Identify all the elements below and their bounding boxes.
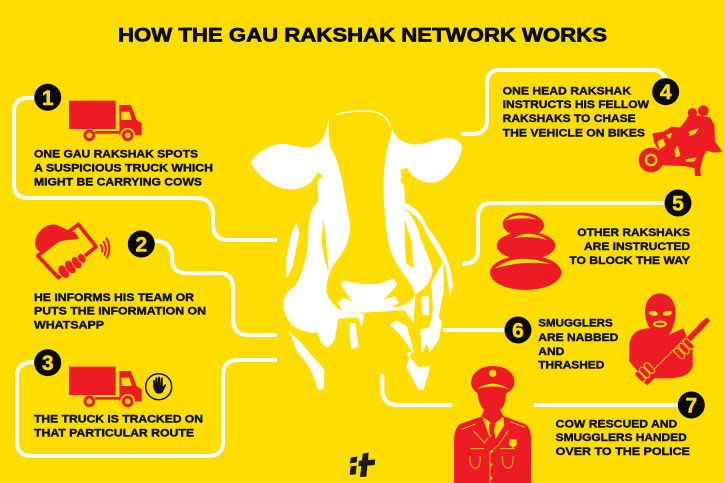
cow muzzle [338,279,415,313]
cow left ear and face [251,121,364,347]
step 2 [34,224,206,332]
number badge 3: 3 [42,352,54,375]
step 2 text: HE INFORMS HIS TEAM OR [34,292,194,304]
step 4 text [503,85,649,139]
number badge 5 [664,190,692,216]
title: HOW THE GAU RAKSHAK NETWORK WORKS [118,24,607,46]
step 6 text [538,318,618,372]
step 6 text: AND [538,346,564,358]
number badge 7 [678,392,705,418]
number badge 2 [128,230,155,258]
cow left neck stripe [287,223,299,277]
step 6 text: ARE NABBED [538,332,618,344]
logo [350,453,375,477]
icon: masked smuggler with gun [629,293,710,385]
step 2 text: WHATSAPP [34,320,104,332]
icon: truck [69,101,142,143]
step 6 text: SMUGGLERS [538,318,613,330]
step 5 text [569,227,690,267]
step 2 text [34,292,206,332]
step 1 [34,84,213,188]
step 3 [34,349,203,440]
step 4 [503,78,722,176]
cow bottom right patch [390,321,430,389]
cow head illustration [251,111,462,389]
step 7 text: COW RESCUED AND [556,418,677,430]
step 7 text: SMUGGLERS HANDED [556,432,687,444]
number badge 5: 5 [672,192,684,216]
step 4 text: THE VEHICLE ON BIKES [503,127,645,139]
step 1 text: MIGHT BE CARRYING COWS [34,176,202,188]
cow left neck cut [322,220,328,271]
step 7 text: OVER TO THE POLICE [556,446,690,458]
step 1 text [34,149,213,188]
cow small strip [403,303,414,322]
step 5 text: OTHER RAKSHAKS [577,227,690,239]
cow small patch [422,296,429,315]
step 2 text: PUTS THE INFORMATION ON [34,306,206,318]
step 7 [454,366,705,483]
step 3 text: THE TRUCK IS TRACKED ON [34,414,203,426]
number badge 7: 7 [685,394,697,418]
cow right lower patch [421,262,443,353]
step 7 text [556,418,690,458]
step 1 text: A SUSPICIOUS TRUCK WHICH [34,163,213,175]
icon: motorbike riders [639,105,722,176]
cow bottom left patch [290,333,324,389]
number badge 1 [34,84,61,111]
cow head top line [337,111,391,127]
step 3 text [34,414,203,440]
cow right neck cut [405,222,413,267]
icon: stacked stones [490,212,561,290]
step 6 text: THRASHED [538,360,604,372]
icon: stop hand [146,374,172,400]
connector lines [14,70,682,456]
step 4 text: ONE HEAD RAKSHAK [503,85,632,97]
step 5 [490,190,692,290]
number badge 6: 6 [512,320,524,342]
number badge 6 [504,316,532,344]
step 1 text: ONE GAU RAKSHAK SPOTS [34,149,198,161]
number badge 4 [652,78,679,105]
step 3 text: THAT PARTICULAR ROUTE [34,428,194,440]
step 6 [504,293,710,385]
step 4 text: INSTRUCTS HIS FELLOW [503,99,649,111]
number badge 4: 4 [660,81,672,104]
cow chin spot [350,323,358,349]
number badge 3 [34,349,61,376]
number badge 2: 2 [135,234,147,256]
step 5 text: ARE INSTRUCTED [584,241,690,253]
number badge 1: 1 [42,87,54,110]
step 4 text: RAKSHAKS TO CHASE [503,113,636,125]
cow right neck strand [405,203,453,295]
icon: truck [69,367,142,409]
cow right ear and face [384,130,462,294]
icon: hand holding phone [35,224,109,280]
icon: police officer [454,366,531,483]
cow eye mark [401,178,403,184]
step 5 text: TO BLOCK THE WAY [569,255,690,267]
